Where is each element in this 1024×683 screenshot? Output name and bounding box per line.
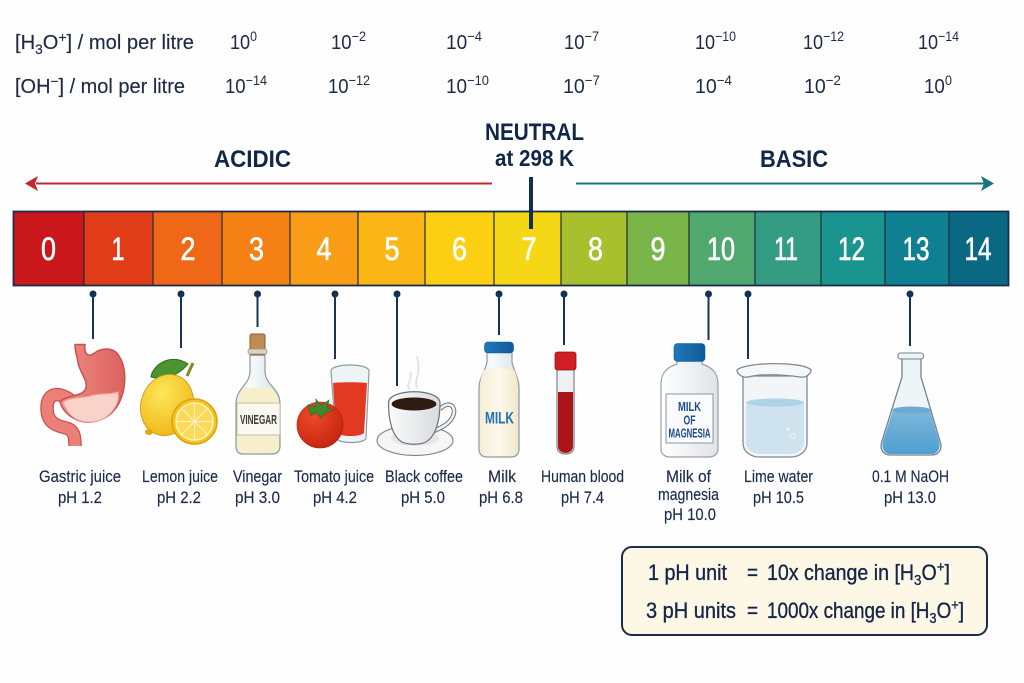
callout: pH unit rule: O xyxy=(937,598,951,623)
icon: milk bottle: MILK xyxy=(485,408,515,428)
label: gastric juice: pH 1.2 xyxy=(58,489,102,507)
pH scale bar: 8 xyxy=(588,231,603,267)
row: hydronium concentration: + xyxy=(58,29,66,45)
row: hydronium concentration: −12 xyxy=(823,28,844,44)
label: milk of magnesia: magnesia xyxy=(658,486,720,504)
neutral marker xyxy=(529,177,533,229)
pH scale bar: 12 xyxy=(838,231,865,267)
row: hydronium concentration: O xyxy=(43,31,58,54)
heading: basic: BASIC xyxy=(760,146,828,173)
row: hydroxide concentration: 10 xyxy=(563,75,586,98)
label: human blood: Human blood xyxy=(541,468,624,486)
icon: milk of magnesia bottle: OF xyxy=(684,412,696,428)
label: black coffee: Black coffee xyxy=(385,468,463,486)
icon: lime water beaker xyxy=(737,364,811,457)
pH scale bar: 4 xyxy=(316,231,332,267)
label: vinegar: pH 3.0 xyxy=(235,489,280,507)
row: hydronium concentration: 3 xyxy=(35,41,43,57)
heading: acidic: ACIDIC xyxy=(214,146,291,173)
icon: vinegar bottle xyxy=(236,334,280,454)
callout: pH unit rule: ] xyxy=(959,598,964,623)
row: hydronium concentration: −2 xyxy=(352,28,366,44)
callout: pH unit rule: 3 xyxy=(914,572,921,589)
label: milk: pH 6.8 xyxy=(479,489,523,507)
row: hydroxide concentration: 10 xyxy=(804,75,827,98)
label: lime water: pH 10.5 xyxy=(753,489,804,507)
icon: blood test tube xyxy=(555,352,576,454)
label: lemon juice: pH 2.2 xyxy=(157,489,201,507)
icon: tomato juice xyxy=(297,365,369,448)
row: hydroxide concentration: [OH xyxy=(15,75,51,98)
pH scale bar: 7 xyxy=(522,231,536,267)
callout: pH unit rule: ] xyxy=(945,560,950,585)
callout: pH unit rule: O xyxy=(921,560,937,585)
label: milk of magnesia: Milk of xyxy=(666,468,711,486)
row: hydroxide concentration: ] / mol per litre xyxy=(58,75,185,98)
label: lemon juice: Lemon juice xyxy=(142,468,218,486)
label: human blood xyxy=(541,468,624,507)
row: hydroxide concentration xyxy=(15,72,952,98)
callout: pH unit rule: 1 pH unit xyxy=(648,560,727,585)
row: hydronium concentration: −14 xyxy=(938,28,959,44)
icon: lemon xyxy=(133,359,217,444)
row: hydronium concentration: [H xyxy=(15,31,36,54)
pH scale bar: 9 xyxy=(650,231,666,267)
pH scale bar: 5 xyxy=(384,231,400,267)
row: hydroxide concentration: −4 xyxy=(717,72,732,88)
callout: pH unit rule: 3 pH units xyxy=(646,598,736,623)
row: hydroxide concentration: 0 xyxy=(945,72,952,88)
row: hydroxide concentration: −14 xyxy=(246,72,267,88)
row: hydronium concentration: −7 xyxy=(585,28,599,44)
icon: vinegar bottle: VINEGAR xyxy=(240,412,277,427)
row: hydronium concentration xyxy=(15,28,959,57)
callout: pH unit rule: = xyxy=(747,598,758,623)
label: lime water: Lime water xyxy=(744,468,813,486)
pH scale bar: 13 xyxy=(902,231,930,267)
icon: milk of magnesia bottle: MAGNESIA xyxy=(668,426,711,440)
icon: milk bottle xyxy=(479,342,519,457)
label: gastric juice xyxy=(39,468,121,507)
label: NaOH xyxy=(872,468,949,507)
label: NaOH: pH 13.0 xyxy=(884,489,936,507)
label: vinegar xyxy=(233,468,282,507)
row: hydroxide concentration: 10 xyxy=(225,75,248,98)
heading: neutral at 298 K xyxy=(485,119,584,171)
row: hydronium concentration: 10 xyxy=(331,31,354,54)
label: NaOH: 0.1 M NaOH xyxy=(872,468,949,486)
row: hydroxide concentration: 10 xyxy=(695,75,718,98)
row: hydronium concentration: −10 xyxy=(715,28,736,44)
heading: neutral at 298 K: at 298 K xyxy=(495,145,574,171)
labels: substances xyxy=(39,468,949,524)
label: black coffee: pH 5.0 xyxy=(401,489,445,507)
callout: pH unit rule: + xyxy=(937,559,945,576)
label: gastric juice: Gastric juice xyxy=(39,468,121,486)
label: lime water xyxy=(744,468,813,507)
row: hydronium concentration: 10 xyxy=(695,31,718,54)
label: black coffee xyxy=(385,468,463,507)
pH scale bar: 10 xyxy=(707,231,735,267)
pH scale bar: 11 xyxy=(774,231,798,267)
heading: neutral at 298 K: NEUTRAL xyxy=(485,119,584,146)
pH scale bar: 0 xyxy=(41,231,56,267)
label: human blood: pH 7.4 xyxy=(561,489,604,507)
row: hydroxide concentration: −2 xyxy=(826,72,841,88)
pH scale bar: 3 xyxy=(249,231,264,267)
row: hydroxide concentration: −7 xyxy=(585,72,600,88)
icon: stomach xyxy=(47,344,125,446)
label: milk xyxy=(479,468,523,507)
row: hydronium concentration: 10 xyxy=(803,31,826,54)
row: hydroxide concentration: 10 xyxy=(924,75,947,98)
row: hydronium concentration: 0 xyxy=(250,28,257,44)
row: hydroxide concentration: 10 xyxy=(446,75,469,98)
row: hydronium concentration: 10 xyxy=(918,31,941,54)
row: hydronium concentration: ] / mol per litre xyxy=(66,31,194,54)
callout: pH unit rule: = xyxy=(747,560,758,585)
callout: pH unit rule: 3 xyxy=(929,610,937,627)
callout: pH unit rule: 10x change in [H xyxy=(767,560,932,585)
label: milk: Milk xyxy=(488,468,517,486)
concentration table xyxy=(15,28,959,98)
arrow: basic direction xyxy=(576,176,994,191)
row: hydroxide concentration: −12 xyxy=(349,72,370,88)
row: hydronium concentration: 10 xyxy=(446,31,469,54)
callout: pH unit rule: + xyxy=(951,597,959,614)
label: milk of magnesia: pH 10.0 xyxy=(664,506,716,524)
label: tomato juice: pH 4.2 xyxy=(313,489,357,507)
row: hydronium concentration: −4 xyxy=(467,28,482,44)
row: hydronium concentration: 10 xyxy=(230,31,253,54)
row: hydroxide concentration: −10 xyxy=(467,72,489,88)
label: vinegar: Vinegar xyxy=(233,468,282,486)
icon: black coffee xyxy=(377,356,454,456)
callout: pH unit rule: 1000x change in [H xyxy=(767,598,957,623)
icon: milk of magnesia bottle: MILK xyxy=(678,399,701,414)
label: tomato juice xyxy=(294,468,374,507)
label: tomato juice: Tomato juice xyxy=(294,468,374,486)
pH scale bar: 2 xyxy=(180,231,196,267)
pH scale bar xyxy=(13,211,1009,286)
label: milk of magnesia xyxy=(658,468,720,524)
pointer pins xyxy=(90,290,914,386)
row: hydronium concentration: 10 xyxy=(564,31,587,54)
pH scale bar: 14 xyxy=(964,231,992,267)
pH scale bar: 1 xyxy=(112,231,124,267)
row: hydroxide concentration: 10 xyxy=(328,75,351,98)
arrow: acidic direction xyxy=(25,176,492,191)
icon: NaOH flask xyxy=(881,353,941,455)
pH scale bar: 6 xyxy=(452,231,467,267)
callout: pH unit rule xyxy=(622,547,987,635)
row: hydroxide concentration: − xyxy=(51,73,58,89)
icon: milk of magnesia bottle xyxy=(661,344,718,457)
label: lemon juice xyxy=(142,468,218,507)
